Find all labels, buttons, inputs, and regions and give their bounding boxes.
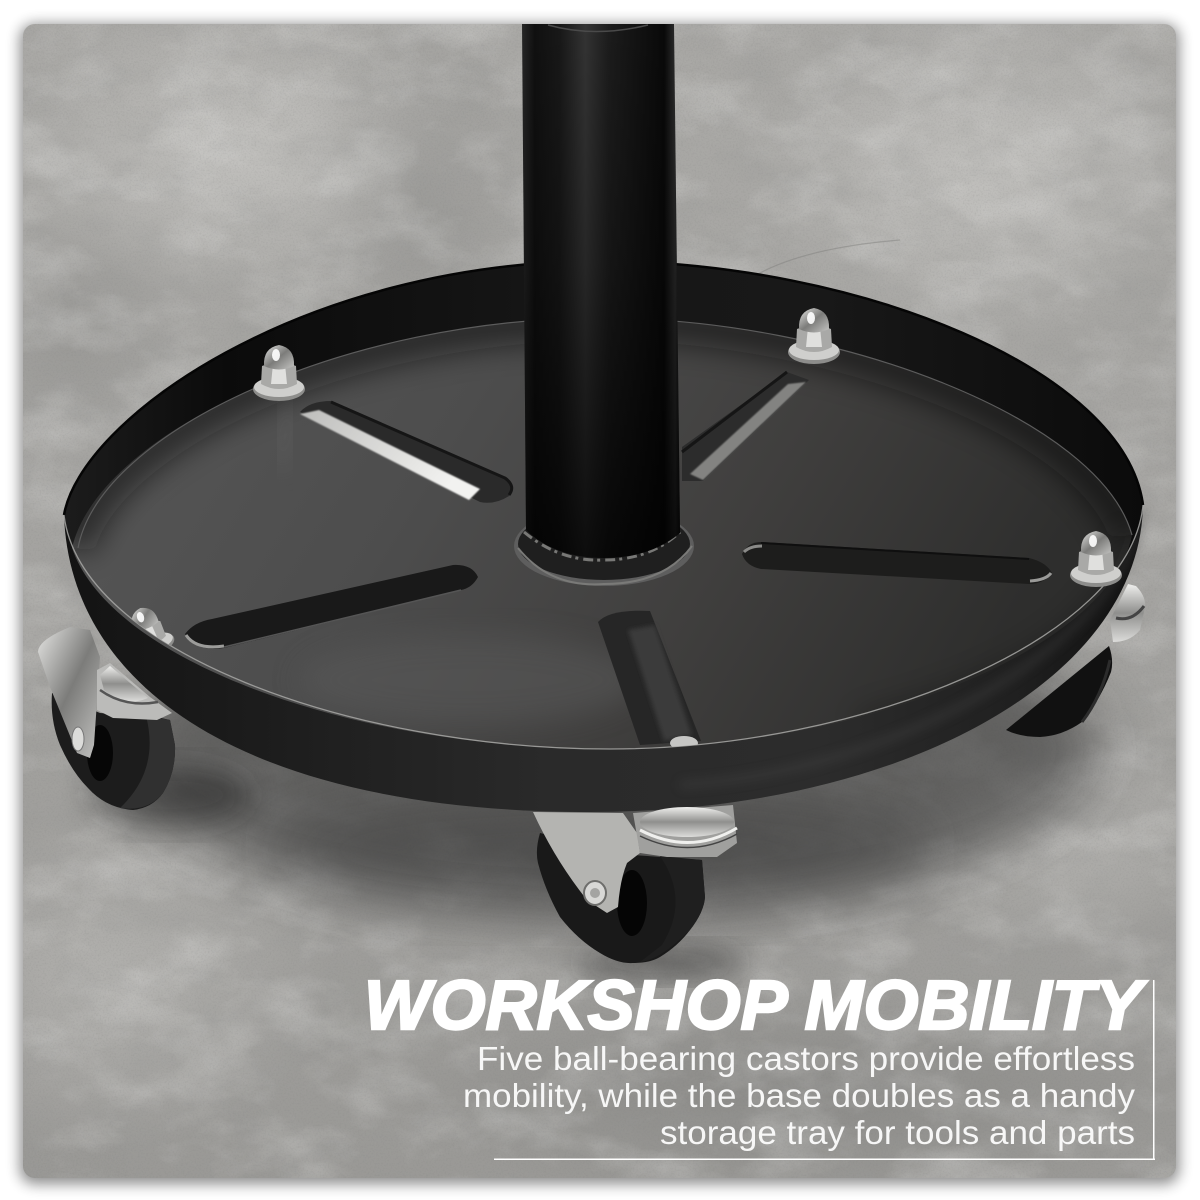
bolt: right	[1070, 531, 1122, 587]
tray: floor	[64, 318, 1143, 749]
tray: rim top and inner wall	[62, 263, 1144, 552]
title: WORKSHOP MOBILITY	[364, 966, 1147, 1044]
shadow under tray	[76, 660, 1126, 988]
weld collar	[514, 524, 694, 586]
rib: upper right	[682, 372, 809, 481]
body text: storage tray for tools and parts	[660, 1114, 1135, 1151]
castor: rear right	[1006, 584, 1145, 737]
rim front edge highlight	[64, 505, 1143, 749]
rib: front	[598, 611, 701, 745]
bolt: back right	[788, 308, 840, 364]
body text	[463, 1040, 1136, 1151]
body text: Five ball-bearing castors provide effortless	[477, 1040, 1135, 1077]
bolts	[119, 308, 1122, 750]
castor: left	[38, 627, 175, 810]
rib: lower left	[185, 565, 478, 649]
central pole	[522, 24, 680, 558]
decorative frame lines and caption	[364, 966, 1155, 1160]
rib: right	[742, 542, 1052, 584]
bolt: front	[670, 736, 698, 747]
bolt: back left	[253, 345, 305, 401]
frame: bottom rule	[494, 1158, 1155, 1160]
castor: front	[533, 805, 737, 963]
tray: outer band	[64, 507, 1148, 812]
rib: upper left	[300, 401, 512, 503]
body text: mobility, while the base doubles as a handy	[463, 1077, 1136, 1114]
frame: right rule	[1153, 980, 1154, 1160]
bolt: front left	[132, 608, 174, 646]
